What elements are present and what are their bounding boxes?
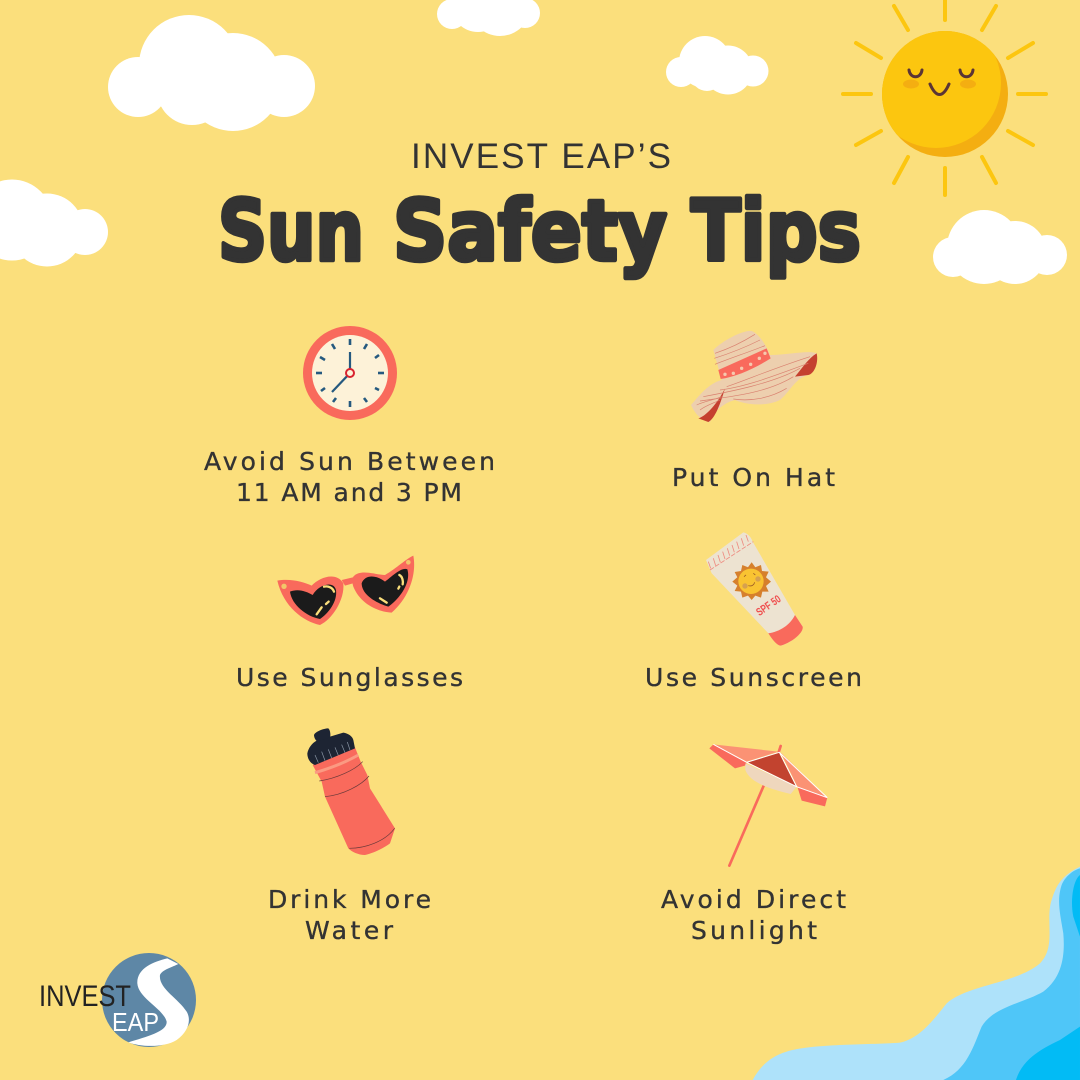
cloud: right bbox=[933, 210, 1067, 284]
logo: invest eap bbox=[39, 953, 196, 1047]
title: Safety bbox=[393, 182, 667, 280]
label: avoid direct sunlight: Sunlight bbox=[691, 916, 817, 945]
label: avoid direct sunlight: Avoid Direct bbox=[661, 885, 846, 914]
icon: sun bbox=[843, 0, 1046, 195]
label: avoid sun between: 11 AM and 3 PM bbox=[236, 478, 462, 507]
label: drink more water bbox=[268, 885, 431, 945]
cloud: top centre bbox=[437, 0, 540, 36]
label: drink more water: Water bbox=[305, 916, 394, 945]
label: put on hat: Put On Hat bbox=[672, 463, 835, 492]
cloud: large top left bbox=[108, 15, 315, 131]
sea waves bbox=[753, 867, 1080, 1080]
label: drink more water: Drink More bbox=[268, 885, 431, 914]
icon: clock bbox=[303, 326, 397, 420]
icon: sunscreen tube bbox=[706, 532, 803, 646]
cloud: left edge bbox=[0, 180, 108, 266]
label: avoid sun between: Avoid Sun Between bbox=[204, 447, 495, 476]
icon: heart sunglasses bbox=[277, 556, 414, 625]
subtitle: INVEST EAP’S bbox=[411, 137, 671, 176]
icon: sun hat bbox=[691, 331, 817, 422]
label: avoid sun between bbox=[204, 447, 495, 507]
logo: invest eap: EAP bbox=[112, 1007, 159, 1037]
label: avoid direct sunlight bbox=[661, 885, 846, 945]
label: use sunscreen: Use Sunscreen bbox=[645, 663, 862, 692]
title: Tips bbox=[691, 182, 861, 280]
label: use sunglasses: Use Sunglasses bbox=[236, 663, 463, 692]
logo: invest eap: INVEST bbox=[39, 980, 131, 1013]
cloud: top right of centre bbox=[666, 36, 768, 94]
icon: sunscreen tube: SPF 50 bbox=[754, 593, 783, 619]
title bbox=[218, 182, 861, 280]
icon: beach umbrella bbox=[709, 744, 827, 866]
title: Sun bbox=[218, 182, 364, 280]
icon: water bottle bbox=[307, 728, 395, 855]
